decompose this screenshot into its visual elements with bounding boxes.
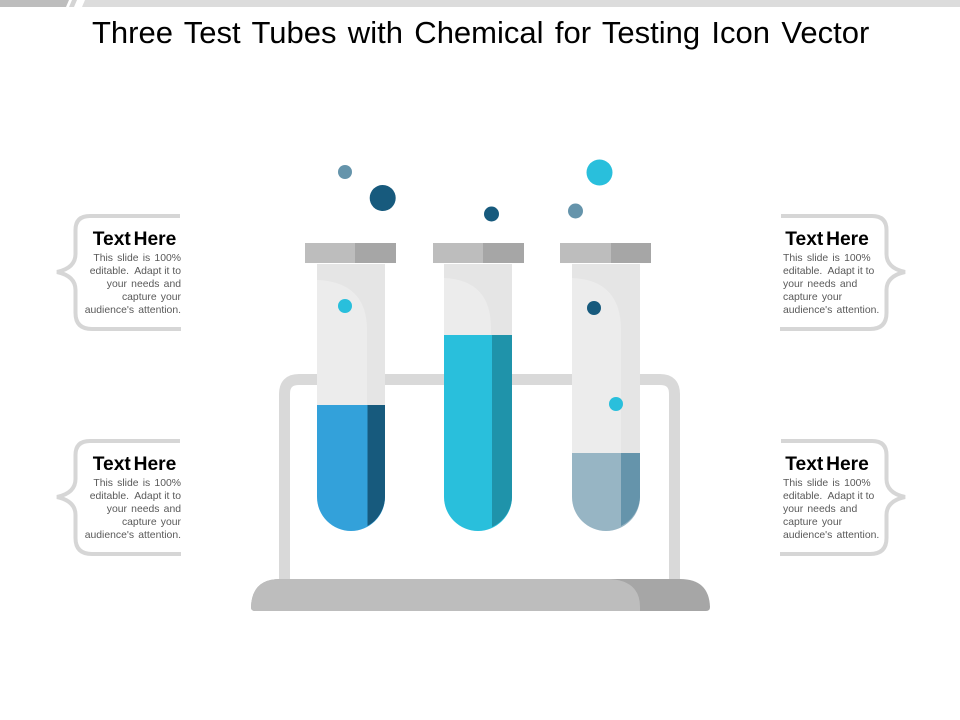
callout: bottom left (57, 441, 182, 554)
rack frame (284, 380, 674, 582)
body text: capture your (783, 292, 843, 303)
body text: audience's attention. (783, 530, 879, 541)
heading: Text Here (93, 229, 177, 250)
body text: audience's attention. (85, 305, 181, 316)
left brace (57, 441, 181, 554)
heading: Text Here (785, 229, 869, 250)
body text: This slide is 100% (783, 253, 871, 264)
top decorative bar (0, 0, 960, 7)
rising bubbles (338, 160, 612, 222)
heading: Text Here (93, 454, 177, 475)
tube 3 inner bubbles (587, 301, 623, 411)
right brace (780, 216, 905, 329)
body text: This slide is 100% (93, 478, 181, 489)
body text: editable. Adapt it to (783, 266, 874, 277)
heading: Text Here (785, 454, 869, 475)
body text: your needs and (107, 279, 181, 290)
tube 2 cap (433, 243, 524, 263)
rack base (251, 579, 710, 611)
body text: audience's attention. (783, 305, 879, 316)
tube 1 inner bubble (338, 299, 352, 313)
test tube 3: grey blue (560, 243, 651, 531)
tube 2 liquid (444, 335, 512, 531)
callout: bottom right (780, 441, 905, 554)
body text: your needs and (107, 504, 181, 515)
body text: editable. Adapt it to (90, 266, 181, 277)
tube 1 glass (317, 264, 385, 405)
tube 3 cap (560, 243, 651, 263)
body text: audience's attention. (85, 530, 181, 541)
body text: editable. Adapt it to (783, 491, 874, 502)
body text: capture your (122, 517, 182, 528)
body text: your needs and (783, 504, 857, 515)
body text: This slide is 100% (93, 253, 181, 264)
test tube rack (251, 380, 710, 611)
body text: capture your (783, 517, 843, 528)
tube 3 liquid (572, 453, 640, 531)
left brace (57, 216, 181, 329)
tube 3 glass (572, 264, 640, 453)
test tube 1: blue (305, 243, 396, 531)
body text: editable. Adapt it to (90, 491, 181, 502)
tube 1 liquid (317, 405, 385, 531)
body text: your needs and (783, 279, 857, 290)
tube 1 cap (305, 243, 396, 263)
callout: top left (57, 216, 182, 329)
title: Three Test Tubes with Chemical for Testing Icon Vector (92, 15, 869, 50)
body text: capture your (122, 292, 182, 303)
tube 2 glass (444, 264, 512, 335)
callout: top right (780, 216, 905, 329)
body text: This slide is 100% (783, 478, 871, 489)
right brace (780, 441, 905, 554)
test tube 2: cyan (433, 243, 524, 531)
